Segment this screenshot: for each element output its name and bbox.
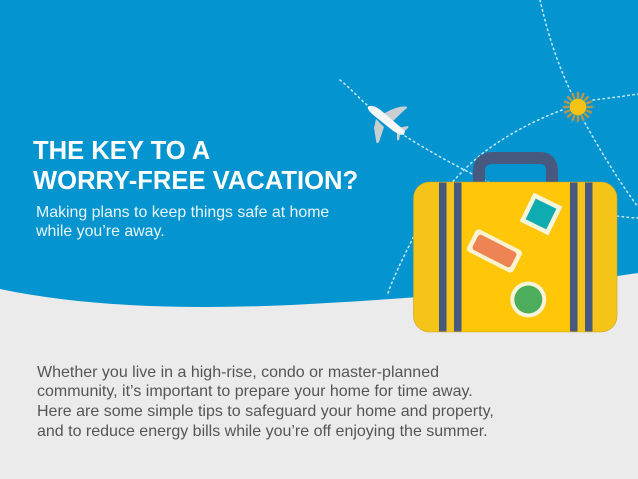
suitcase centre panel xyxy=(461,182,570,332)
icon: airplane xyxy=(368,106,408,143)
title: WORRY-FREE VACATION? xyxy=(33,167,358,195)
body text: Here are some simple tips to safeguard your home and property, xyxy=(37,403,494,420)
body text: Whether you live in a high-rise, condo or master-planned xyxy=(37,364,439,380)
sticker: orange rectangle xyxy=(466,228,523,274)
icon: sun xyxy=(564,93,592,121)
suitcase straps xyxy=(439,182,592,332)
subtitle: Making plans to keep things safe at home xyxy=(36,204,329,221)
body text: and to reduce energy bills while you’re off enjoying the summer. xyxy=(37,423,488,440)
sticker: green circle xyxy=(510,282,546,318)
sticker: teal square xyxy=(520,193,562,235)
subtitle xyxy=(36,204,329,240)
title: THE KEY TO A xyxy=(33,136,210,164)
body text: community, it’s important to prepare your home for time away. xyxy=(37,383,473,400)
title xyxy=(33,136,358,195)
body text xyxy=(37,364,494,440)
panel: blue sky header xyxy=(0,0,638,307)
dotted flight paths xyxy=(340,0,638,296)
subtitle: while you’re away. xyxy=(36,223,165,240)
suitcase body xyxy=(414,182,617,332)
icon: suitcase xyxy=(414,158,617,332)
suitcase handle xyxy=(479,158,552,184)
